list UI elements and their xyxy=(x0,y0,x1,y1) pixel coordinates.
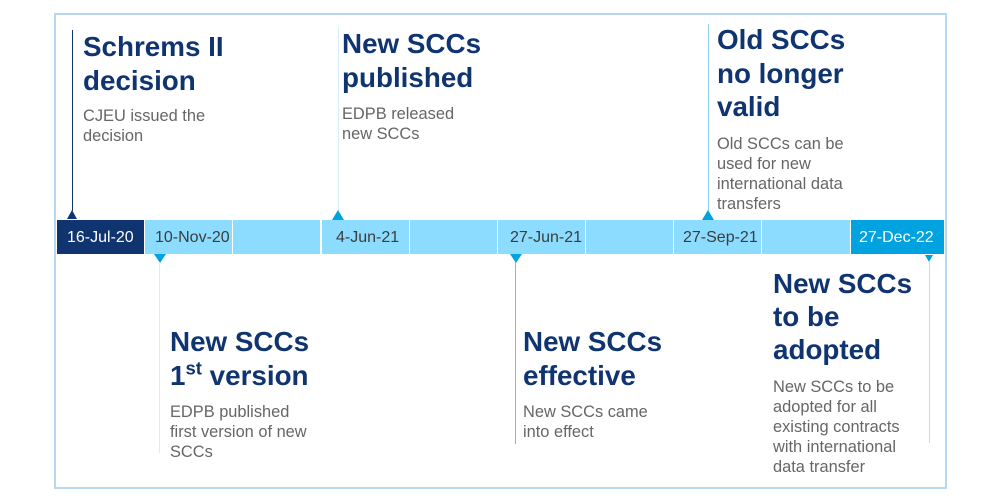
segment: 16-Jul-20 xyxy=(57,220,144,254)
description: used for new xyxy=(717,155,811,173)
heading: New SCCs xyxy=(170,326,309,357)
description xyxy=(717,135,844,213)
event: New SCCs published xyxy=(332,27,481,220)
description xyxy=(523,403,648,441)
connector line xyxy=(929,262,930,443)
marker arrow xyxy=(510,254,522,263)
segment: 27-Sep-21: 27-Sep-21 xyxy=(683,229,758,246)
segment: 16-Jul-20: 16-Jul-20 xyxy=(67,229,134,246)
segment: 27-Jun-21: 27-Jun-21 xyxy=(510,229,582,246)
description: new SCCs xyxy=(342,125,419,143)
heading: effective xyxy=(523,360,636,390)
description: first version of new xyxy=(170,423,307,441)
description: international data xyxy=(717,175,843,193)
segment: 27-Dec-22 xyxy=(851,220,944,254)
segment: 27-Sep-21 xyxy=(674,220,761,254)
event: Schrems II decision xyxy=(67,30,224,219)
heading xyxy=(342,28,481,93)
segment: 27-Dec-22: 27-Dec-22 xyxy=(859,229,934,246)
description xyxy=(83,107,205,145)
heading: to be xyxy=(773,301,839,332)
event: New SCCs 1st version xyxy=(154,254,309,461)
timeline bar xyxy=(57,220,944,254)
heading: published xyxy=(342,62,473,92)
description: New SCCs came xyxy=(523,403,648,421)
heading: decision xyxy=(83,64,196,96)
marker arrow xyxy=(154,254,166,263)
heading: adopted xyxy=(773,334,881,365)
description: with international xyxy=(773,438,896,456)
description: data transfer xyxy=(773,458,865,476)
connector line xyxy=(72,30,73,211)
heading xyxy=(170,326,309,390)
heading: New SCCs xyxy=(773,268,912,299)
connector line xyxy=(515,262,516,444)
description xyxy=(342,105,454,143)
description: SCCs xyxy=(170,443,213,461)
heading: Schrems II xyxy=(83,31,224,62)
segment: 10-Nov-20 xyxy=(145,220,232,254)
description xyxy=(170,403,307,461)
description: existing contracts xyxy=(773,418,900,436)
description: EDPB released xyxy=(342,105,454,123)
segment: 27-Jun-21 xyxy=(498,220,585,254)
heading: New SCCs xyxy=(523,326,662,357)
connector line xyxy=(708,24,709,211)
description: transfers xyxy=(717,195,781,213)
heading: no longer xyxy=(717,58,844,88)
marker arrow xyxy=(67,210,77,219)
heading: Old SCCs xyxy=(717,24,845,55)
heading xyxy=(717,24,845,122)
heading xyxy=(773,268,912,365)
segment: empty xyxy=(410,220,497,254)
heading: New SCCs xyxy=(342,28,481,59)
heading: 1st version xyxy=(170,357,309,390)
connector line xyxy=(159,262,160,453)
marker arrow xyxy=(332,210,344,220)
description: Old SCCs can be xyxy=(717,135,844,153)
description xyxy=(773,378,900,476)
segment: 10-Nov-20: 10-Nov-20 xyxy=(155,229,230,246)
description: CJEU issued the xyxy=(83,107,205,125)
marker arrow xyxy=(925,255,933,262)
description: adopted for all xyxy=(773,398,877,416)
segment: empty xyxy=(586,220,673,254)
description: New SCCs to be xyxy=(773,378,894,396)
segment: empty xyxy=(233,220,320,254)
description: into effect xyxy=(523,423,594,441)
segment: empty xyxy=(762,220,850,254)
event: New SCCs effective xyxy=(510,254,662,444)
event: Old SCCs no longer valid xyxy=(702,24,845,220)
description: EDPB published xyxy=(170,403,289,421)
heading xyxy=(523,326,662,390)
event: New SCCs to be adopted xyxy=(773,255,933,476)
heading: valid xyxy=(717,91,780,122)
connector line xyxy=(338,27,339,211)
segment: 4-Jun-21: 4-Jun-21 xyxy=(336,229,399,246)
heading xyxy=(83,31,224,96)
description: decision xyxy=(83,127,143,145)
marker arrow xyxy=(702,210,714,220)
segment: 4-Jun-21 xyxy=(322,220,409,254)
